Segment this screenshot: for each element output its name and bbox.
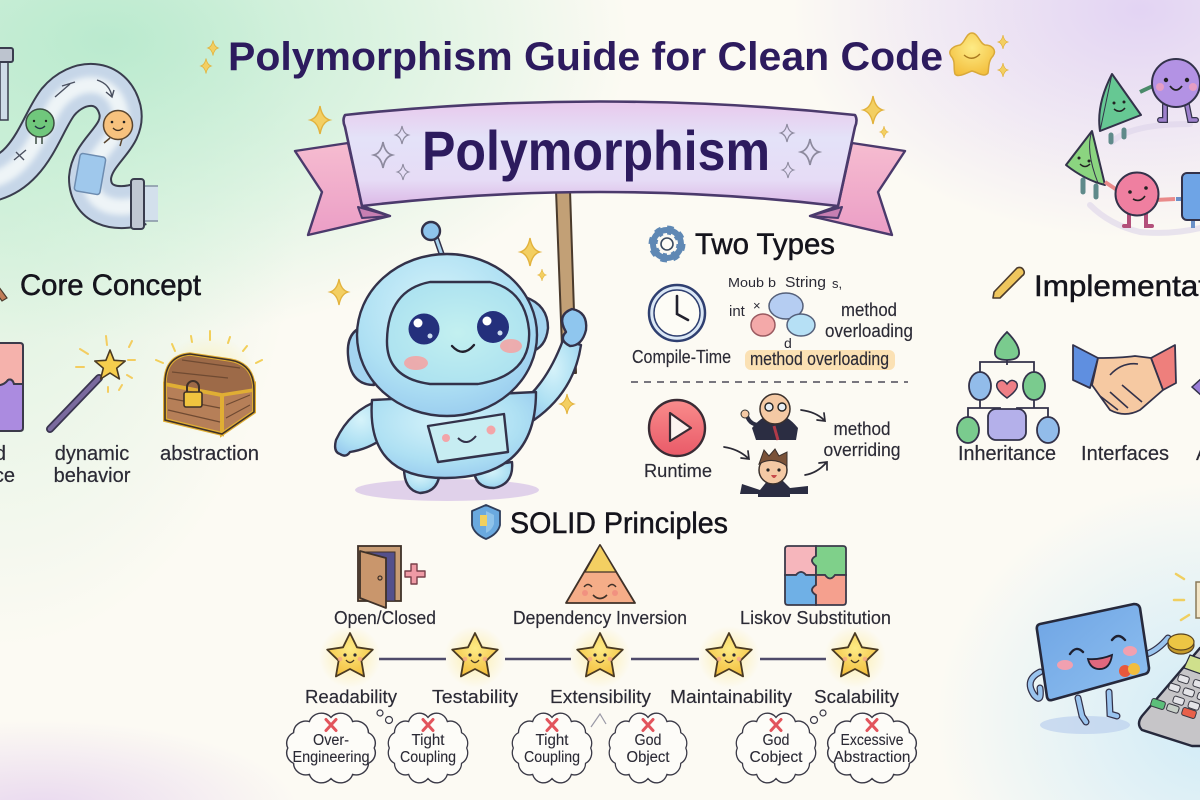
- icon: door: [358, 546, 401, 608]
- section: Core Concept: [0, 269, 262, 487]
- code fragments: d: [784, 335, 792, 351]
- green triangle character top: [1099, 74, 1141, 142]
- cloud: Over-Engineering: [287, 713, 375, 783]
- cloud: God Cobject: [736, 713, 816, 783]
- quality labels: Scalability: [814, 687, 899, 707]
- cloud: God Cobject: God: [762, 732, 790, 749]
- text: method overloading: method: [841, 300, 897, 320]
- banner left tail: [295, 143, 390, 235]
- label: abstraction: abstraction: [160, 443, 259, 465]
- star: Testability: [444, 626, 506, 688]
- cloud: Tight Coupling 2: Coupling: [524, 749, 580, 766]
- heading: Two Types: Two Types: [695, 228, 835, 261]
- title: Polymorphism Guide for Clean Code: [228, 35, 943, 79]
- banner: [295, 96, 905, 373]
- code fragments: ×: [753, 298, 761, 313]
- star: Extensibility: [569, 626, 631, 688]
- highlight: method overloading: method overloading: [750, 349, 889, 369]
- divider: dashed: [631, 381, 908, 383]
- robot cheeks: [404, 339, 522, 370]
- label: Inheritance: Inheritance: [958, 443, 1056, 465]
- cloud: Tight Coupling 2: Tight: [536, 732, 569, 749]
- robot right arm: [530, 340, 581, 420]
- robot shadow: [355, 479, 539, 501]
- robot sparkles: [330, 238, 574, 414]
- quality labels: Extensibility: [550, 687, 651, 707]
- quality labels: Readability: [305, 687, 397, 707]
- icon: clock: [649, 285, 705, 341]
- text: method overloading: [825, 300, 913, 341]
- robot left arm: [335, 400, 392, 456]
- cloud: Tight Coupling 1: Coupling: [400, 749, 456, 766]
- coin: [1168, 634, 1194, 654]
- card face: [1057, 636, 1140, 677]
- quality labels: [305, 687, 899, 707]
- card legs and arms: [1030, 638, 1168, 722]
- connector lines: [379, 658, 826, 660]
- cloud: Tight Coupling 1: Tight: [412, 732, 445, 749]
- cloud: Over-Engineering: Engineering: [292, 749, 370, 766]
- quality labels: Testability: [432, 687, 518, 707]
- cloud: Tight Coupling 2: [512, 713, 592, 783]
- label: Liskov Substitution: Liskov Substitution: [740, 608, 891, 628]
- code fragments: int: [729, 303, 746, 320]
- icon: ruler pencil: [993, 267, 1024, 298]
- icon: morphing clouds: [751, 293, 815, 336]
- robot legs: [404, 462, 512, 493]
- section: SOLID Principles: [287, 505, 916, 783]
- section: Two Types: [631, 228, 913, 497]
- character: parent: [741, 394, 798, 440]
- cloud: Excessive Abstraction: [828, 713, 916, 783]
- robot face plate: [387, 282, 529, 384]
- icon: handshake: [1073, 345, 1176, 414]
- heading: Core Concept: Core Concept: [20, 269, 202, 302]
- label: dynamic behavior: behavior: [54, 465, 131, 487]
- gold sparkles: [310, 96, 888, 138]
- star: Maintainability: [698, 626, 760, 688]
- icon: clipped purple shape: [1192, 377, 1200, 397]
- pink ball character: [1105, 172, 1175, 226]
- label: dynamic behavior: dynamic: [55, 443, 129, 465]
- cloud: God Object: Object: [626, 749, 670, 766]
- icon: inheritance tree: [957, 332, 1059, 443]
- robot head: [357, 254, 537, 416]
- illustration: pipe with objects: [0, 48, 158, 229]
- banner stick: [556, 190, 576, 373]
- blue square character: [1176, 173, 1200, 228]
- text: method overriding: method: [834, 419, 890, 439]
- code fragments: String: [785, 274, 826, 291]
- label: unified interface: [0, 443, 15, 487]
- code fragments: [728, 274, 842, 351]
- robot mascot: [330, 222, 586, 501]
- robot antenna: [422, 222, 443, 258]
- banner fold shadows: [358, 207, 842, 218]
- card shadow: [1040, 716, 1130, 734]
- robot eyes: [408, 311, 509, 344]
- banner right tail: [810, 143, 905, 235]
- robot body: [372, 392, 536, 478]
- icon: pyramid: [566, 545, 635, 603]
- cloud: Tight Coupling 1: [388, 713, 468, 783]
- icon: magic wand: [50, 336, 135, 429]
- icon: title sparkles left: [201, 40, 218, 74]
- icon: treasure chest: [156, 331, 262, 435]
- ground shadows: [1090, 124, 1200, 233]
- cloud: Excessive Abstraction: Excessive: [840, 732, 904, 749]
- quality labels: Maintainability: [670, 687, 792, 707]
- label: Dependency Inversion: Dependency Inversion: [513, 608, 687, 628]
- icon: puzzle: [0, 343, 23, 431]
- code fragments: s,: [832, 276, 842, 291]
- purple ball character: [1140, 59, 1200, 120]
- cloud: Excessive Abstraction: Abstraction: [834, 749, 910, 766]
- icon: shield: [472, 505, 500, 539]
- thought bubble dots: [377, 710, 826, 727]
- label: Runtime: Runtime: [644, 461, 712, 481]
- star: Scalability: [824, 626, 886, 688]
- cloud: God Object: [609, 713, 687, 783]
- receipt rays: [1174, 574, 1200, 620]
- cloud: Over-Engineering: Over-: [313, 732, 349, 749]
- text: method overloading: overloading: [825, 321, 913, 341]
- label: Compile-Time: Compile-Time: [632, 347, 731, 367]
- icon: play button: [649, 400, 705, 456]
- text: method overriding: overriding: [824, 440, 900, 460]
- banner ribbon band: [344, 102, 856, 206]
- icon: plus: [405, 564, 425, 584]
- icon: SOLID puzzle: [785, 546, 846, 605]
- illustration: polymorphic characters: [1066, 59, 1200, 233]
- icon: pencil tip: [0, 283, 7, 301]
- green triangle character bottom: [1066, 131, 1105, 197]
- cloud: God Object: God: [634, 732, 662, 749]
- heading: SOLID Principles: SOLID Principles: [510, 507, 728, 540]
- label: Interfaces: Interfaces: [1081, 443, 1169, 465]
- robot smile: [452, 345, 474, 352]
- illustration: credit card and terminal: [1030, 574, 1200, 746]
- robot belly panel: [428, 414, 508, 462]
- card body: [1037, 604, 1149, 700]
- robot ears: [348, 297, 548, 385]
- icon: title star: [950, 33, 1008, 77]
- arrows: overriding: [724, 410, 827, 475]
- section: Implementation: [957, 267, 1200, 465]
- text: method overriding: [824, 419, 900, 460]
- character: child: [740, 449, 808, 497]
- banner outline sparkles: [374, 124, 819, 180]
- robot hand: [562, 309, 586, 346]
- label: dynamic behavior: [54, 443, 131, 487]
- cloud: God Cobject: Cobject: [750, 749, 803, 766]
- banner text: Polymorphism: [422, 119, 770, 182]
- label: Open/Closed: Open/Closed: [334, 608, 436, 628]
- payment terminal: [1139, 648, 1200, 746]
- star: Readability: [319, 626, 381, 688]
- icon: gear: [653, 230, 681, 258]
- code fragments: Moub b: [728, 275, 776, 290]
